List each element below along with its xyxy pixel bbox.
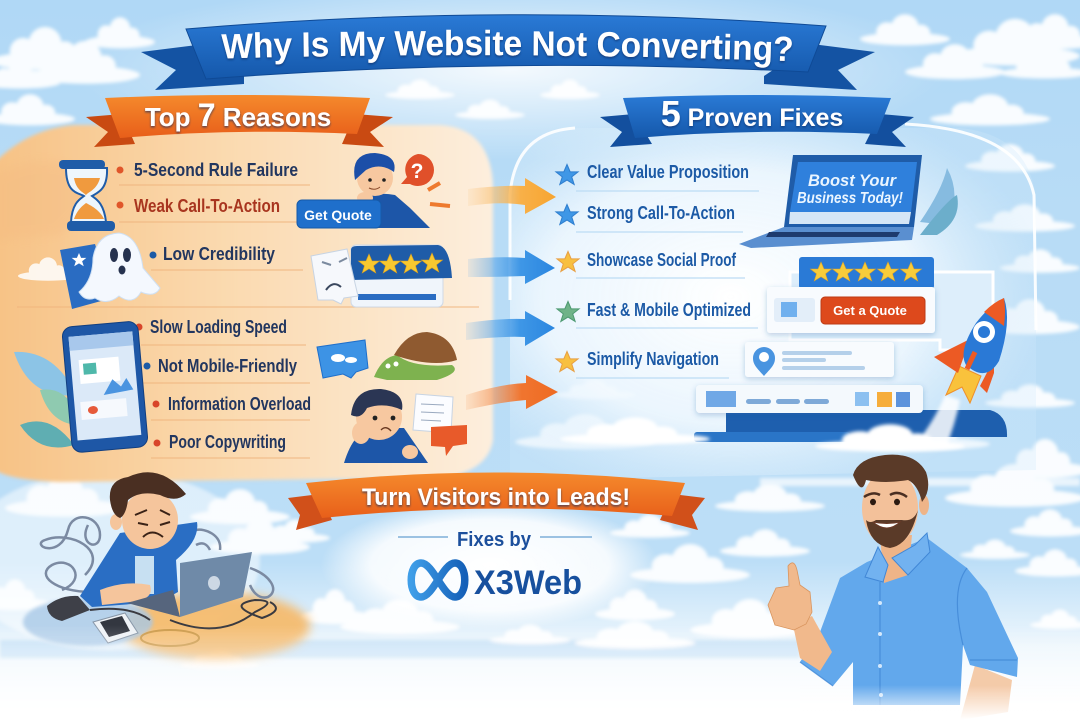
- glow behind logo: [320, 500, 660, 630]
- cloud on panel: [18, 257, 78, 281]
- shirt buttons: [878, 601, 883, 697]
- illustration: leaves and phone: [14, 321, 148, 453]
- reasons list: Not Mobile-Friendly: [158, 356, 297, 376]
- reasons list: Poor Copywriting: [169, 432, 286, 452]
- tangled wires: [41, 517, 273, 598]
- icon: ghost with folder: [60, 233, 160, 309]
- fixes list: Fast & Mobile Optimized: [587, 300, 751, 320]
- eyes: [870, 499, 900, 505]
- top glow: [70, 0, 950, 160]
- panel: top 7 reasons: [0, 125, 493, 482]
- slogan: Turn Visitors into Leads!: [362, 484, 630, 511]
- body: [80, 522, 197, 607]
- illustration: laptop boost your business: [739, 155, 958, 248]
- reasons list: Slow Loading Speed: [150, 317, 287, 337]
- ground: [120, 592, 310, 660]
- illustration: smiling man thumbs up: [768, 455, 1018, 720]
- base: [726, 410, 1007, 437]
- torso and sleeves: [800, 538, 1018, 705]
- illustration: frustrated reader: [344, 389, 467, 463]
- fix dividers: [576, 191, 759, 378]
- ear: [919, 495, 929, 515]
- red bubble: [431, 425, 467, 456]
- speech bubble: [401, 154, 434, 186]
- shirt shading: [800, 568, 1017, 705]
- heading: Top 7 Reasons: [145, 97, 331, 133]
- illustration: rocket: [934, 298, 1007, 403]
- reasons list: [116, 160, 311, 452]
- document: [413, 394, 453, 433]
- reasons list: Weak Call-To-Action: [134, 196, 280, 216]
- icon: turtle: [374, 332, 457, 380]
- fixes list: Showcase Social Proof: [587, 250, 737, 270]
- forearm: [100, 583, 151, 605]
- fixes by label: Fixes by: [457, 529, 532, 551]
- arrow: orange-yellow: [468, 178, 556, 214]
- arrow: blue 2: [466, 311, 555, 346]
- rating stars: [358, 253, 442, 273]
- head: [122, 491, 178, 549]
- back panel: [790, 272, 993, 350]
- smile: [873, 522, 900, 528]
- neck: [880, 535, 912, 583]
- fixes list: [556, 162, 751, 371]
- sad face card: [311, 249, 358, 304]
- logo: X3Web: [411, 563, 582, 602]
- speech bubble: ?: [411, 160, 423, 183]
- illustration: bad review card: [311, 245, 452, 307]
- laptop: [180, 552, 252, 617]
- hair: [110, 472, 186, 518]
- icon: hourglass: [59, 160, 115, 231]
- illustration: frustrated man at laptop: [23, 472, 310, 660]
- arrow: orange: [466, 375, 558, 410]
- title banner: [110, 14, 904, 128]
- button: get quote: [297, 200, 381, 228]
- fixes list: Clear Value Proposition: [587, 162, 749, 182]
- panel: 5 proven fixes: [510, 124, 1036, 480]
- collar: [865, 533, 930, 582]
- quote card: [767, 287, 935, 333]
- toolbar card: [696, 385, 923, 413]
- leaves: [920, 168, 954, 225]
- illustration: laptop boost your business: Business Today!: [797, 190, 903, 207]
- cables and tablet: [90, 600, 276, 628]
- reasons list: Information Overload: [168, 394, 311, 414]
- heading: 5 Proven Fixes: [661, 93, 843, 134]
- left forearm: [793, 616, 832, 671]
- rating tab: [799, 257, 934, 289]
- reasons list: Low Credibility: [163, 244, 275, 264]
- illustration: web page mockups: [694, 257, 1007, 442]
- navigation card: [745, 342, 894, 377]
- icon: chat bubble: [317, 340, 368, 378]
- fixes list: Simplify Navigation: [587, 349, 719, 369]
- arrow: blue 1: [468, 250, 555, 284]
- row dividers: [17, 185, 479, 458]
- hand: [768, 563, 812, 630]
- banner: turn visitors into leads: [288, 472, 705, 530]
- right forearm: [960, 665, 1012, 720]
- reasons list: 5-Second Rule Failure: [134, 160, 298, 180]
- logo: X3Web: X3Web: [474, 564, 582, 602]
- face: [862, 470, 918, 546]
- bottom mist: [800, 685, 1080, 720]
- cloud base of mockups: [560, 395, 965, 452]
- banner: top 7 reasons: [86, 95, 393, 147]
- title: Why Is My Website Not Converting?: [220, 30, 793, 71]
- illustration: confused user with get quote button: [297, 153, 450, 228]
- beard: [866, 510, 918, 548]
- screen text: Boost Your: [808, 172, 898, 190]
- hair: [853, 455, 928, 502]
- button: get a quote: [821, 297, 925, 324]
- fixes list: Strong Call-To-Action: [587, 203, 735, 223]
- bottom fade: [0, 625, 1080, 720]
- button: get quote: Get Quote: [304, 207, 372, 223]
- banner: 5 proven fixes: [600, 93, 914, 147]
- button: get a quote: Get a Quote: [833, 303, 907, 318]
